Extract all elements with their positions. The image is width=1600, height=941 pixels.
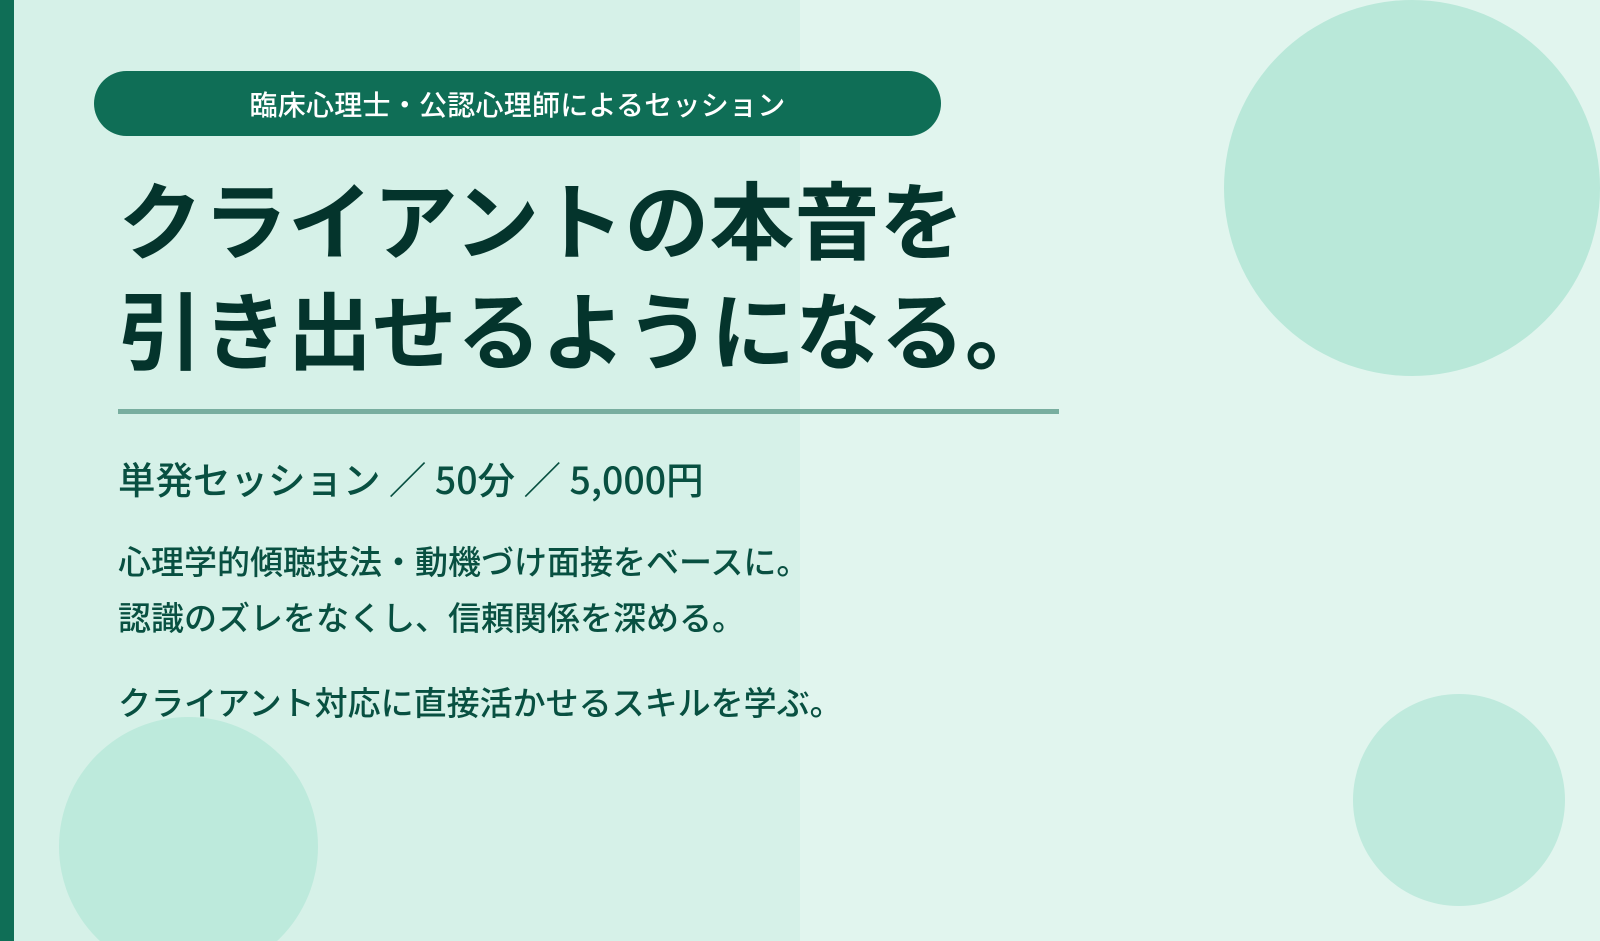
decorative circle: top right bbox=[1224, 0, 1600, 376]
divider rule bbox=[118, 409, 1059, 414]
decorative circle: bottom right bbox=[1353, 694, 1565, 906]
left accent bar bbox=[0, 0, 14, 941]
badge: session presenter: 臨床心理士・公認心理師によるセッション bbox=[250, 84, 785, 124]
title: 引き出せるようになる。 bbox=[118, 266, 1050, 388]
description text: 認識のズレをなくし、信頼関係を深める。 bbox=[118, 592, 745, 640]
title: クライアントの本音を bbox=[118, 156, 964, 278]
title bbox=[118, 156, 1050, 388]
benefit text: クライアント対応に直接活かせるスキルを学ぶ。 bbox=[118, 677, 843, 725]
description text bbox=[118, 536, 809, 640]
decorative circle: bottom left bbox=[59, 717, 318, 941]
panel: left tinted background bbox=[0, 0, 800, 941]
session details: 単発セッション ／ 50分 ／ 5,000円 bbox=[118, 450, 704, 505]
description text: 心理学的傾聴技法・動機づけ面接をベースに。 bbox=[118, 536, 809, 584]
badge: session presenter bbox=[94, 70, 941, 136]
